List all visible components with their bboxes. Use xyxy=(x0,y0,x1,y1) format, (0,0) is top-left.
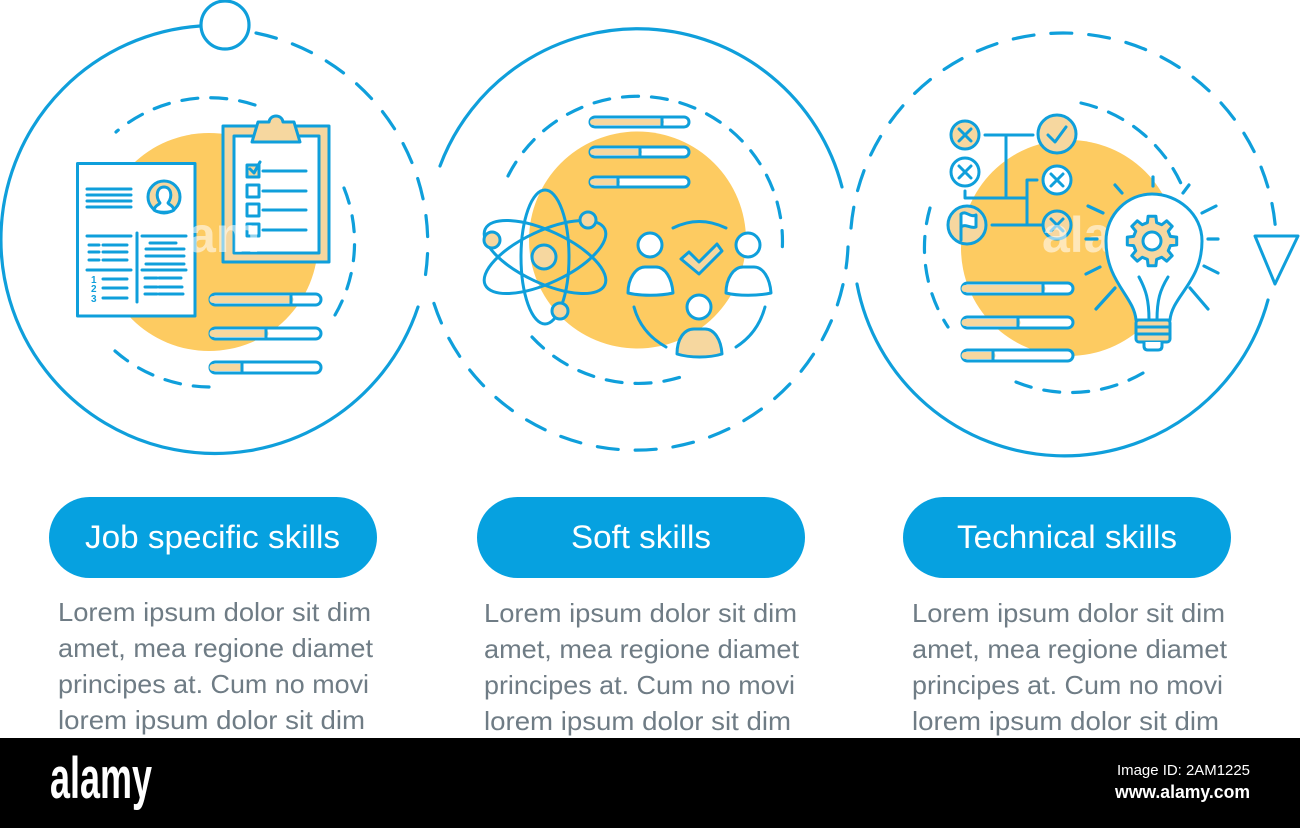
heading pill: soft skills: Soft skills xyxy=(571,519,711,555)
outer ring 3 xyxy=(851,33,1276,456)
text block: soft skills xyxy=(484,598,800,736)
panel: technical skills xyxy=(851,33,1298,456)
heading pill: job specific skills: Job specific skills xyxy=(85,519,340,555)
heading pill: job specific skills xyxy=(49,497,377,578)
progress bars 1 xyxy=(210,294,321,373)
panel: soft skills xyxy=(432,29,848,450)
text block: technical skills: lorem ipsum dolor sit dim xyxy=(912,706,1219,736)
footer image id: Image ID: 2AM1225 xyxy=(1117,762,1250,779)
icon: team with check xyxy=(628,222,771,357)
progress bars 2 xyxy=(590,117,689,187)
yellow background circle 1 xyxy=(100,133,318,351)
text block: job specific skills: Lorem ipsum dolor sit dim xyxy=(58,597,371,627)
outer ring 2 xyxy=(432,29,848,450)
text block: technical skills: amet, mea regione diamet xyxy=(912,634,1228,664)
icon: resume document xyxy=(78,164,195,316)
text block: soft skills: amet, mea regione diamet xyxy=(484,634,800,664)
heading pill: soft skills xyxy=(477,497,805,578)
inner dashed ring 3 xyxy=(924,103,1185,393)
outer ring 1 xyxy=(1,1,428,453)
text block: job specific skills: principes at. Cum no movi xyxy=(58,669,369,699)
heading pill: technical skills: Technical skills xyxy=(957,519,1177,555)
watermark 1: am xyxy=(188,207,260,263)
text block: soft skills: Lorem ipsum dolor sit dim xyxy=(484,598,797,628)
text block: soft skills: lorem ipsum dolor sit dim xyxy=(484,706,791,736)
icon: light bulb with gear xyxy=(1106,194,1202,350)
footer logo: alamy xyxy=(50,746,152,811)
numbered list digits: 2 xyxy=(91,284,97,295)
footer bar xyxy=(0,738,1300,828)
inner dashed ring 1 xyxy=(115,98,355,387)
panel: job specific skills xyxy=(1,1,428,453)
progress bars 3 xyxy=(962,283,1073,361)
icon: decision tree xyxy=(948,115,1076,244)
yellow background circle 2 xyxy=(529,132,746,348)
text block: job specific skills: amet, mea regione diamet xyxy=(58,633,374,663)
inner dashed ring 2 xyxy=(508,96,782,383)
text block: technical skills: principes at. Cum no movi xyxy=(912,670,1223,700)
heading pill: technical skills xyxy=(903,497,1231,578)
numbered list digits xyxy=(91,275,97,305)
icon: clipboard checklist xyxy=(223,116,329,262)
text block: job specific skills: lorem ipsum dolor sit dim xyxy=(58,705,365,735)
numbered list digits: 1 xyxy=(91,275,97,286)
text block: technical skills xyxy=(912,598,1228,736)
icon: light rays xyxy=(1086,177,1218,309)
arrow head xyxy=(1255,236,1298,284)
text block: job specific skills xyxy=(58,597,374,735)
footer url: www.alamy.com xyxy=(1114,782,1250,802)
icon: atom xyxy=(474,190,616,324)
text block: technical skills: Lorem ipsum dolor sit dim xyxy=(912,598,1225,628)
watermark 3: ala xyxy=(1042,207,1113,263)
text block: soft skills: principes at. Cum no movi xyxy=(484,670,795,700)
yellow background circle 3 xyxy=(961,140,1177,356)
numbered list digits: 3 xyxy=(91,294,97,305)
